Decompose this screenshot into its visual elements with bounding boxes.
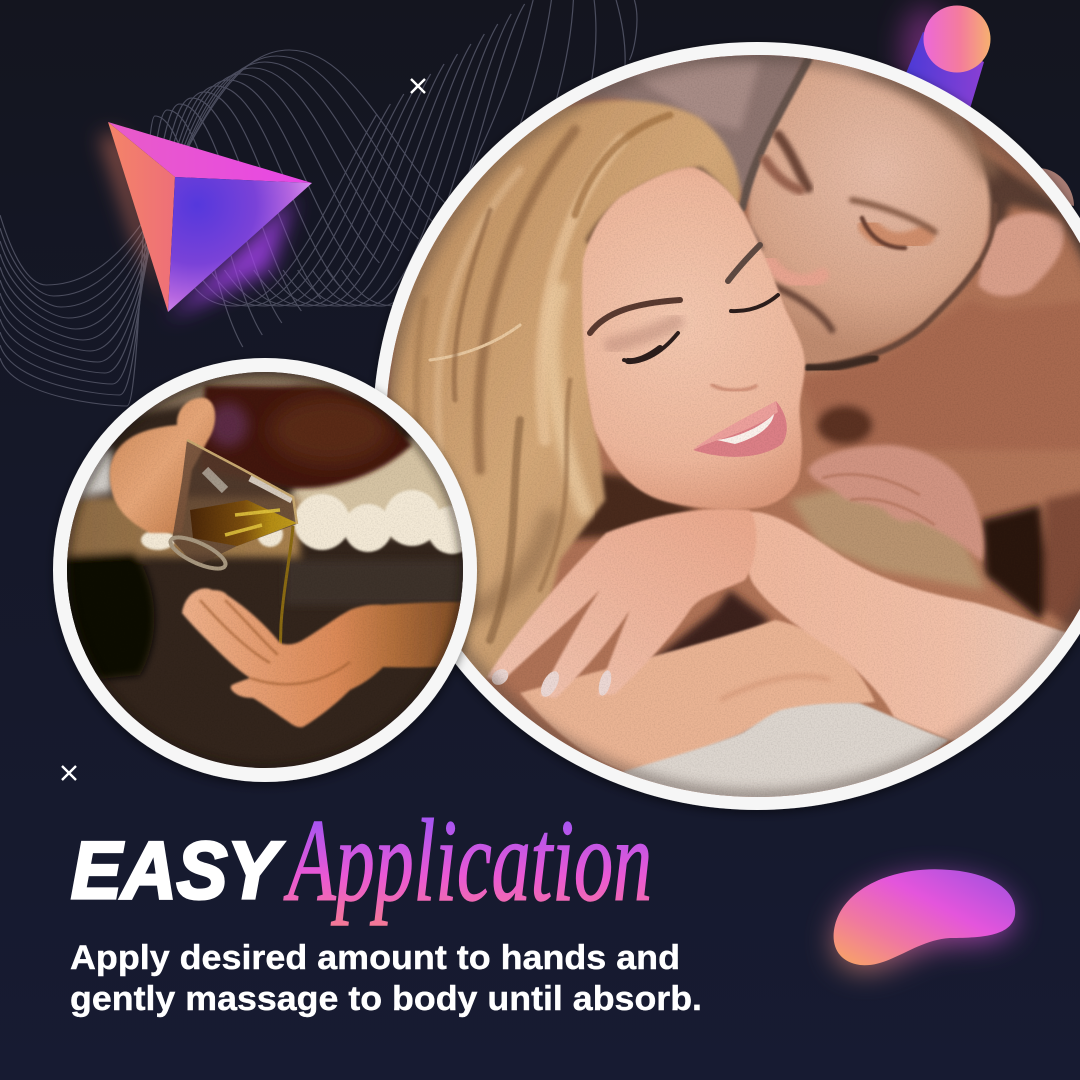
left eyebrow [590, 300, 680, 333]
title: Application script: Application [283, 795, 652, 926]
fingers on man's hand [822, 474, 935, 525]
cylinder cap [924, 6, 990, 72]
glass highlights [250, 478, 292, 500]
lower arm [520, 620, 875, 772]
white towel [622, 703, 949, 810]
top tan band [120, 369, 400, 420]
moustache [772, 285, 832, 330]
glass gravy boat [167, 440, 297, 575]
icon: 3D triangle [100, 122, 312, 318]
small photo contents [60, 369, 480, 780]
hair shading along the top [870, 66, 990, 170]
icon: x mark lower [62, 766, 76, 780]
paper grain overlay [380, 50, 1080, 810]
man's right shoulder shade [1045, 490, 1080, 640]
oil flecks [225, 510, 280, 535]
left eye lashes [624, 333, 678, 361]
man's features [742, 60, 995, 368]
big circle white ring [373, 42, 1080, 810]
glass foot [167, 531, 229, 575]
dark brown blob [200, 386, 412, 489]
right eye lashes [731, 295, 778, 311]
right eyebrow [852, 200, 935, 232]
body line two: gently massage to body until absorb. [70, 980, 702, 1018]
body text [70, 939, 702, 1018]
dark cavity under the wrist [652, 587, 773, 657]
finger creases [200, 600, 350, 684]
wall behind the couple [578, 55, 808, 192]
shadow under man's jaw [817, 405, 873, 445]
wrist crease under arm [720, 676, 830, 700]
woman's shoulder [790, 480, 985, 590]
sideburn [978, 205, 995, 265]
fingertip behind ring [1040, 168, 1074, 206]
beard under lip [808, 358, 875, 368]
left eye socket [778, 135, 808, 188]
glass bowl [172, 440, 297, 566]
title: EASY: EASY [71, 826, 285, 916]
nose [770, 262, 822, 281]
nose shadow [712, 385, 756, 390]
cylinder glow [901, 6, 949, 94]
blob body [834, 869, 1015, 965]
oil stream [280, 526, 293, 660]
man's ear [978, 213, 1064, 296]
wave mesh line art [0, 0, 637, 406]
oil in glass [190, 500, 297, 546]
man's upper chest shade [800, 300, 1080, 450]
triangle right face [168, 177, 312, 312]
hair strands [417, 115, 760, 640]
lit patch of wall [634, 59, 760, 130]
pale spot at the left edge [72, 448, 112, 497]
blob glow [834, 875, 1015, 971]
man's head [749, 58, 990, 372]
cream band [280, 410, 480, 540]
lower hand [182, 588, 470, 727]
teeth [717, 414, 774, 444]
strand over forehead [742, 60, 808, 208]
right eye line [862, 218, 905, 248]
left eyelid shadow [612, 322, 676, 345]
bokeh lights [141, 490, 476, 554]
triangle left face [108, 122, 175, 312]
beard line [808, 265, 978, 368]
lips [693, 401, 787, 457]
right eyebrow [728, 245, 760, 281]
small circle white ring [53, 358, 477, 782]
big circular photo: couple [373, 40, 1080, 810]
triangle top face [108, 122, 312, 183]
black shadow left [60, 552, 154, 680]
dark gap under chest [982, 505, 1050, 620]
tan band at left [60, 497, 300, 557]
icon: x mark top [411, 79, 425, 93]
woman's hair [388, 100, 740, 690]
grey right band [285, 560, 475, 605]
woman's features [590, 245, 778, 390]
photo contents [380, 40, 1080, 810]
blob shape bottom right [834, 869, 1015, 971]
upper hand [110, 398, 215, 533]
dark hair under chin [555, 470, 700, 540]
woman's hand [487, 509, 756, 698]
man's hand [808, 445, 984, 562]
woman's face [582, 167, 805, 509]
man's hair [981, 155, 1080, 260]
icon: purple cylinder with pink cap [901, 6, 990, 112]
small circular photo: oil pouring on hand [53, 358, 480, 782]
paper grain overlay [60, 370, 470, 780]
purple tint [208, 403, 248, 447]
upper lip highlight [693, 401, 778, 449]
inner vignette [67, 372, 463, 768]
body line one: Apply desired amount to hands and [70, 939, 680, 977]
red-brown glow inside blob [270, 396, 390, 464]
glass rim [187, 440, 297, 524]
triangle glow [100, 135, 295, 318]
inner vignette [386, 55, 1080, 797]
fingernails [489, 666, 614, 700]
right eyelid [868, 226, 925, 242]
forearm [744, 512, 1080, 745]
cylinder body [904, 32, 984, 112]
